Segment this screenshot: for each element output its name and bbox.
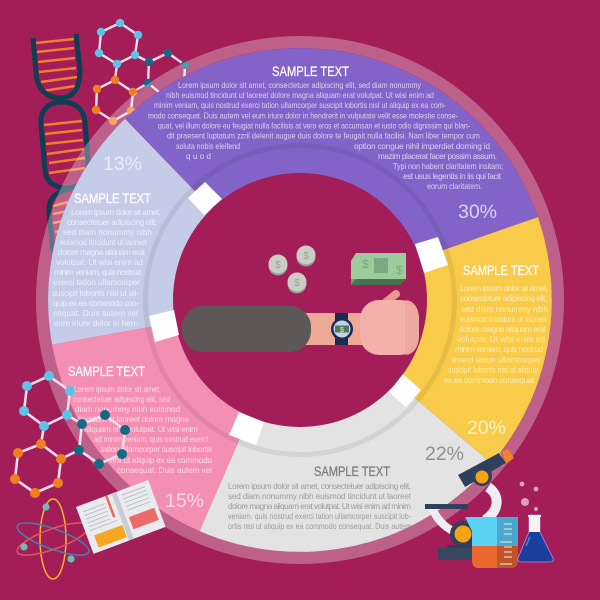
text block: minim veniam, quis nostrud [455, 345, 543, 354]
watch [331, 313, 353, 345]
donut chart segments [48, 48, 552, 552]
percentage: 15% [165, 491, 204, 512]
text block: est usus legentis in iis qui facit [403, 172, 502, 181]
text block: tincidunt ut laoreet dolore magna [78, 415, 189, 424]
text block: modo consequat. Duis autem vel eum iriure dolor in hendrerit in vulputate velit esse molestie conse- [148, 112, 458, 120]
text block: sed diam nonummy nibh euismod tincidunt ut laoreet [228, 492, 412, 501]
text block: volutpat. Ut wisi enim ad [56, 258, 143, 267]
segment: grey 22% [200, 300, 492, 552]
icon: banknotes: $ [396, 263, 403, 277]
text block [52, 208, 161, 328]
segment: lavender 13% [48, 119, 300, 345]
icon: coins: $ [275, 260, 281, 271]
text block: exerci tation ullamcorper [452, 356, 540, 364]
sleeve [182, 306, 311, 352]
icon: coins [268, 246, 316, 294]
text block: eorum claritatem. [427, 182, 482, 191]
icon: coins: $ [294, 278, 300, 289]
percentage: 13% [103, 154, 142, 175]
segment: purple 30% [125, 48, 538, 300]
text block: quip ex ea commodo con- [53, 299, 139, 308]
icon: atom [14, 499, 92, 579]
text block: Lorem ipsum dolor sit amet, [74, 385, 161, 394]
outer ring [42, 42, 558, 558]
illustration: arm with watch [182, 294, 419, 355]
panel: lavender text [52, 154, 161, 328]
text block: soluta nobis eleifend [176, 142, 240, 151]
text block: nibh euismod tincidunt ut laoreet dolore magna aliquam erat volutpat. Ut wisi enim ad [166, 91, 434, 100]
heading: SAMPLE TEXT [314, 463, 390, 479]
text block: consectetuer adipiscing elit, [460, 294, 547, 303]
text block [228, 482, 412, 531]
text block: Lorem ipsum dolor sit amet, consectetuer adipiscing elit, [228, 482, 411, 491]
text block: ad minim veniam, quis nostrud exerci [94, 435, 208, 444]
watch: $ [340, 327, 344, 334]
percentage: 20% [467, 418, 506, 439]
icon: DNA helix [33, 34, 88, 252]
text block: ex ea commodo consequat. [444, 376, 536, 385]
forearm [305, 313, 367, 345]
heading: SAMPLE TEXT [463, 262, 539, 278]
panel: yellow text [444, 262, 548, 439]
text block: Lorem ipsum dolor sit amet, [71, 208, 161, 217]
text block: quod [186, 152, 211, 161]
heading: SAMPLE TEXT [68, 363, 145, 379]
text block: consectetuer adipiscing elit, sed [73, 395, 170, 404]
text block: consequat. Duis autem vel [117, 466, 212, 475]
text block [148, 81, 503, 191]
segment: pink 15% [52, 300, 300, 531]
text block: consectetuer adipiscing elit, [67, 218, 157, 227]
white gates between segments [149, 182, 448, 445]
hand [360, 300, 419, 355]
text block: ortis nisl ut aliquip ex ea commodo consequat. Duis autem [228, 522, 411, 531]
icon: microscope [425, 449, 514, 560]
text block: quat, vel illum dolore eu feugiat nulla facilisis at vero eros et accumsan et iusto odio dignissim qui blan- [158, 122, 470, 130]
icon: banknotes [351, 253, 406, 285]
percentage: 30% [458, 202, 497, 223]
heading: SAMPLE TEXT [74, 190, 151, 206]
text block: Lorem ipsum dolor sit amet, [460, 284, 548, 293]
text block: minim veniam, quis nostrud exerci tation ullamcorper suscipit lobortis nisl ut aliquip ex ea com- [154, 101, 446, 110]
icon: beaker [465, 517, 518, 568]
text block [444, 284, 548, 385]
segment: yellow 20% [300, 217, 552, 464]
bubbles [520, 482, 538, 511]
icon: flask [518, 515, 553, 562]
text block: suscipit lobortis nisl ut aliquip [448, 366, 538, 374]
text block: volutpat. Ut wisi enim ad [457, 335, 545, 344]
inner shadow ring [146, 146, 454, 454]
panel: grey text [228, 444, 464, 531]
text block: sequat. Duis autem vel [53, 309, 138, 318]
text block: dolore magna aliquam erat volutpat. Ut wisi enim ad minim [228, 502, 411, 511]
text block: dolore magna aliquam erat [58, 248, 146, 257]
text block: dolore magna aliquam erat [459, 325, 547, 334]
text block: Lorem ipsum dolor sit amet, consectetuer adipiscing elit, sed diam nonummy [178, 81, 422, 90]
percentage: 22% [425, 444, 464, 465]
text block: aliquam erat volutpat. Ut wisi enim [84, 425, 198, 434]
text block: exerci tation ullamcorper [53, 278, 140, 287]
icon: molecule top [92, 19, 189, 125]
text block: euismod tincidunt ut laoreet [460, 315, 548, 324]
text block: mazim placerat facer possim assum. [378, 152, 497, 161]
icon: molecule bottom [10, 371, 130, 498]
text block: dit praesent luptatum zzril delenit augue duis dolore te feugait nulla facilisi. Nam liber tempor cum [167, 132, 480, 140]
icon: open book [76, 480, 166, 554]
text block: suscipit lobortis nisl ut ali- [52, 289, 139, 298]
text block [73, 385, 212, 475]
text block: minim veniam, quis nostrud [54, 268, 141, 277]
text block: veniam, quis nostrud exerci tation ullamcorper suscipit lob- [228, 512, 411, 521]
heading: SAMPLE TEXT [272, 63, 349, 79]
text block: sed diam nonummy nibh [63, 228, 152, 237]
text block: option congue nihil imperdiet doming id [354, 142, 490, 151]
text block: nisl ut aliquip ex ea commodo [110, 456, 212, 465]
text block: tation ullamcorper suscipit lobortis [101, 445, 212, 454]
panel: purple text [148, 63, 503, 223]
hand shade [405, 300, 419, 355]
text block: euismod tincidunt ut laoreet [60, 238, 148, 247]
text block: Typi non habent claritatem insitam; [393, 162, 503, 171]
thumb [386, 294, 396, 302]
icon: banknotes: $ [362, 257, 369, 271]
text block: diam nonummy nibh euismod [75, 405, 180, 414]
centre hole [173, 173, 427, 427]
text block: eum iriure dolor in hen- [54, 319, 138, 328]
panel: pink text [68, 363, 212, 512]
icon: coins: $ [303, 251, 309, 262]
text block: sed diam nonummy nibh [461, 305, 548, 314]
